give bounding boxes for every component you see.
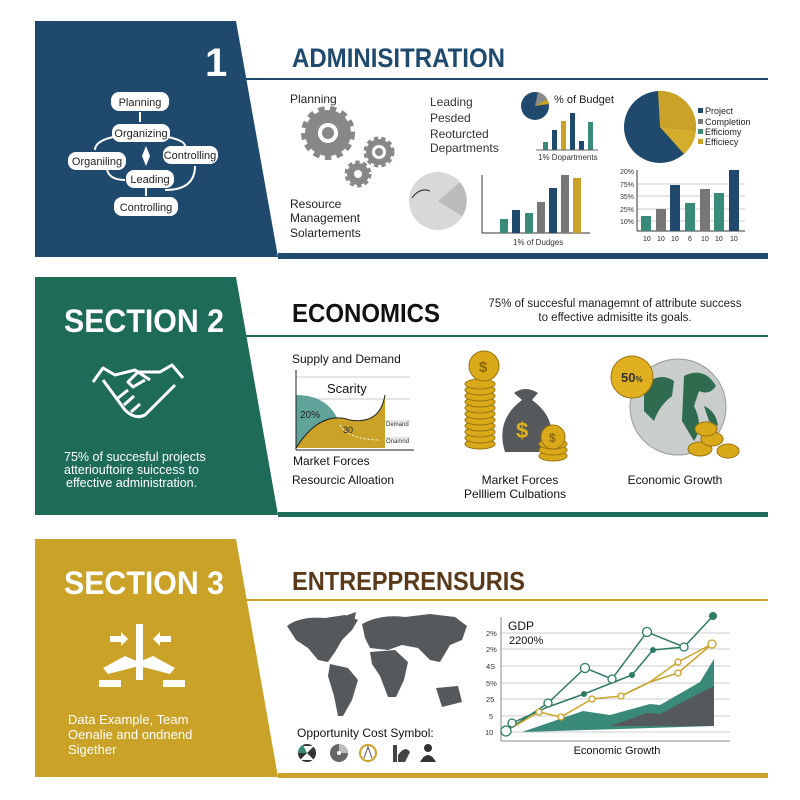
chart: small bars	[536, 113, 598, 162]
text: section 2 caption: atteriouftoire suiccess to	[64, 463, 199, 477]
text: planning: Planning	[290, 92, 337, 106]
icon: coins and money bag: $	[516, 418, 528, 443]
icon: converging arrows	[99, 624, 185, 687]
chart: GDP line chart: GDP	[508, 619, 534, 633]
chart: right bars: 10	[671, 236, 679, 243]
chart: supply and demand: Scarity	[327, 381, 367, 396]
icon: handshake	[93, 365, 183, 417]
section 2: economics	[35, 277, 768, 517]
chart: big pie with legend	[624, 91, 751, 163]
text: section 2 caption: 75% of succesful projects	[64, 450, 206, 464]
chart: GDP line chart: 2%	[486, 645, 497, 654]
chart: big pie with legend: Efficiomy	[705, 127, 742, 137]
text: resource management: Resource	[290, 197, 342, 211]
heading: economics: ECONOMICS	[292, 298, 440, 328]
chart: right bars: 10	[657, 236, 665, 243]
icon: coins and money bag: $	[549, 431, 556, 445]
text: leading: Pesded	[430, 111, 471, 125]
chart: supply and demand	[292, 352, 414, 487]
text: leading: Departments	[430, 141, 499, 155]
text: leading	[430, 95, 499, 155]
text: resource management: Solartements	[290, 226, 361, 240]
chart: GDP line chart: 4S	[486, 662, 495, 671]
text: section 2 caption	[64, 450, 206, 490]
icon: disk	[409, 172, 467, 230]
chart: right bars: 10	[730, 236, 738, 243]
text: leading: Reoturcted	[430, 127, 489, 141]
icon: globe with coins	[611, 356, 739, 487]
chart: right bars: 10	[701, 236, 709, 243]
chart: supply and demand: 20%	[300, 410, 320, 421]
section 3: entrepreneurship	[35, 539, 768, 778]
text: resource management: Management	[290, 211, 361, 225]
chart: GDP line chart	[485, 612, 730, 757]
text: quote: to effective admisitte its goals.	[538, 312, 692, 324]
chart: supply and demand: Onamnd	[386, 439, 409, 445]
panel: section 3 left	[35, 539, 278, 777]
text: section 3 caption: Sigether	[68, 742, 117, 757]
chart: bars of budget: 1% of Dudges	[513, 238, 563, 247]
flowchart: Organiling	[72, 156, 122, 168]
chart: big pie with legend: Efficiecy	[705, 137, 739, 147]
text: quote	[488, 298, 742, 324]
chart: right bars	[620, 169, 745, 243]
icon: coins and money bag: Pellliem Culbations	[464, 487, 566, 501]
text: resource management	[290, 197, 361, 240]
chart: GDP line chart: 5	[489, 712, 493, 721]
panel: section 2 left	[35, 277, 278, 515]
chart: GDP line chart: 5%	[486, 679, 497, 688]
icons: opportunity cost	[298, 744, 436, 762]
chart: GDP line chart: 10	[485, 728, 493, 737]
chart: right bars: 35%	[620, 194, 634, 201]
chart: supply and demand: Market Forces	[293, 454, 370, 468]
chart: GDP line chart: 2200%	[509, 635, 543, 647]
chart: right bars: 10	[715, 236, 723, 243]
chart: big pie with legend: Completion	[705, 117, 751, 127]
heading: section 2: SECTION 2	[64, 303, 224, 339]
flowchart	[68, 92, 218, 216]
chart: right bars: 25%	[620, 207, 634, 214]
section 1: administration	[35, 21, 768, 259]
text: section 3 caption	[68, 712, 192, 757]
chart: right bars: 6	[688, 236, 692, 243]
icon: globe with coins: Economic Growth	[628, 473, 722, 487]
chart: small pie: % of Budget	[554, 94, 614, 106]
icon: coins and money bag	[464, 351, 567, 501]
chart: GDP line chart: 2%	[486, 629, 497, 638]
chart: right bars: 10%	[620, 219, 634, 226]
panel: section 1 left	[35, 21, 278, 257]
flowchart: Controlling	[164, 150, 216, 162]
flowchart: Controlling	[120, 202, 172, 214]
heading: administration: ADMINISITRATION	[292, 43, 505, 73]
chart: small bars: 1% Dopartments	[538, 153, 598, 162]
chart: supply and demand: Resourcic Alloation	[292, 473, 394, 487]
chart: right bars: 20%	[620, 169, 634, 176]
chart: small pie	[521, 92, 614, 120]
chart: big pie with legend: Project	[705, 106, 734, 116]
chart: GDP line chart: Economic Growth	[574, 745, 660, 757]
flowchart: Organizing	[114, 128, 168, 140]
chart: supply and demand: Supply and Demand	[292, 352, 401, 366]
chart: right bars: 75%	[620, 182, 634, 189]
flowchart: Planning	[119, 97, 161, 109]
text: section 2 caption: effective administration.	[66, 476, 197, 490]
text: opportunity cost symbol: Opportunity Cost Symbol:	[297, 726, 434, 740]
text: section 3 caption: Oenalie and ondnend	[68, 727, 192, 742]
icon: globe with coins: 50%	[621, 370, 643, 385]
section number 1: 1	[205, 41, 227, 85]
text: leading: Leading	[430, 95, 473, 109]
chart: supply and demand: Demand	[386, 422, 409, 428]
chart: GDP line chart: 25	[486, 695, 494, 704]
flowchart: Leading	[130, 174, 170, 186]
text: section 3 caption: Data Example, Team	[68, 712, 188, 727]
text: quote: 75% of succesful managemnt of attribute success	[488, 298, 742, 310]
icon: gears	[305, 110, 392, 185]
heading: entrepreneurship: ENTREPPRENSURIS	[292, 566, 525, 596]
icon: world map	[287, 612, 467, 716]
icon: coins and money bag: Market Forces	[482, 473, 558, 487]
chart: bars of budget	[482, 175, 590, 247]
chart: right bars: 10	[643, 236, 651, 243]
chart: supply and demand: 30	[343, 425, 353, 435]
icon: coins and money bag: $	[479, 359, 488, 376]
heading: section 3: SECTION 3	[64, 565, 224, 601]
